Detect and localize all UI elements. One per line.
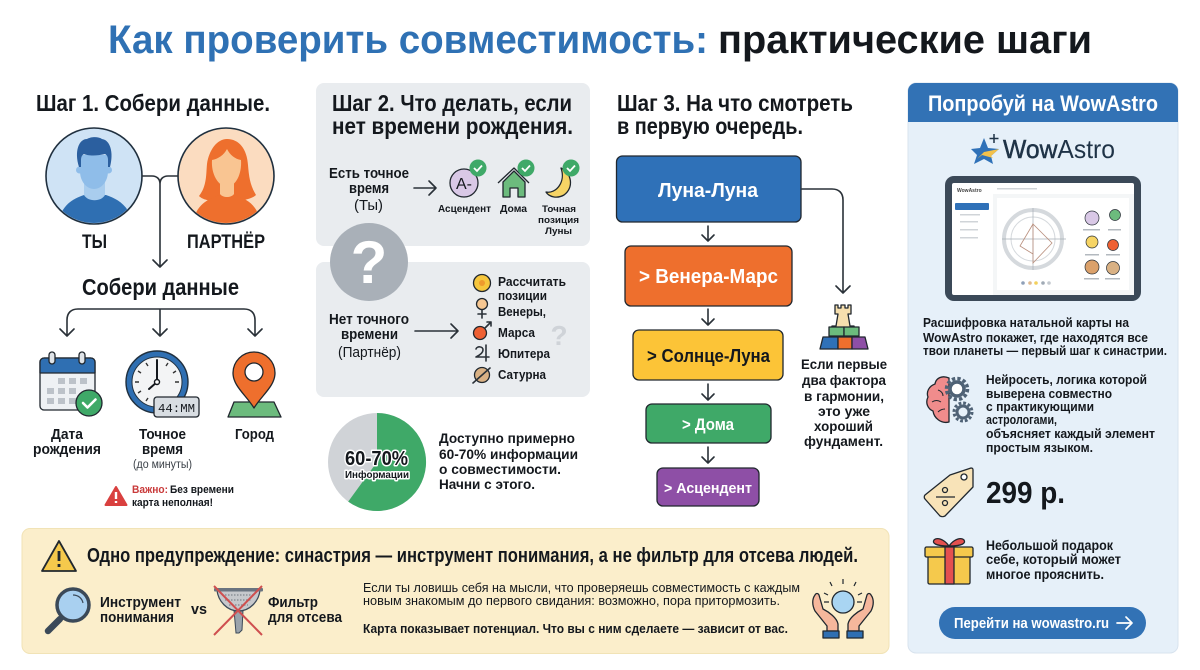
label: birth date: рождения	[33, 441, 101, 458]
label: understanding tool	[100, 594, 181, 626]
AI text	[986, 372, 1155, 455]
step 2 heading: нет времени рождения.	[332, 113, 573, 139]
label: ascendant: Асцендент	[438, 203, 491, 215]
title: практические шаги	[718, 18, 1092, 62]
AI text: астрологами,	[986, 412, 1057, 427]
step 3 heading	[617, 90, 853, 139]
icon: rook on blocks	[820, 305, 868, 349]
foundation note: фундамент.	[804, 433, 883, 449]
label: exact time: время	[142, 441, 183, 458]
box: moon-moon	[616, 156, 801, 222]
box: ascendant	[657, 468, 759, 506]
title: Как проверить совместимость:	[108, 18, 708, 62]
important note: карта неполная!	[132, 497, 213, 509]
icon: magnifier	[48, 589, 89, 631]
panel: step 1	[33, 90, 281, 509]
intro text: твои планеты — первый шаг к синастрии.	[923, 343, 1167, 358]
warning heading: Одно предупреждение: синастрия — инструмент понимания, а не фильтр для отсева людей.	[87, 544, 858, 567]
gift text: себе, который может	[986, 551, 1121, 567]
planets list: позиции	[498, 288, 547, 303]
step 3 heading: Шаг 3. На что смотреть	[617, 90, 853, 116]
arrow: down 3	[702, 384, 714, 400]
icon: saturn	[473, 368, 490, 383]
planets list: Рассчитать	[498, 274, 566, 289]
label: understanding tool: Инструмент	[100, 594, 181, 611]
icon: clock: 44:MM	[158, 402, 195, 416]
arrow: down 4	[702, 447, 714, 463]
label: exact time known	[329, 166, 409, 214]
arrow: avatars to collect data	[142, 176, 178, 267]
icon: brain and gears	[927, 377, 972, 422]
label: exact time: (до минуты)	[133, 459, 192, 471]
box: moon-moon: Луна-Луна	[658, 180, 759, 202]
label: screening filter	[268, 594, 343, 626]
box: venus-mars: > Венера-Марс	[639, 266, 778, 288]
planets list: Сатурна	[498, 367, 547, 382]
important note: Без времени	[170, 484, 234, 496]
label: city: Город	[235, 426, 274, 443]
foundation note: Если первые	[801, 356, 887, 372]
arrow: three branches	[60, 309, 262, 336]
pie chart caption: Доступно примерно	[439, 430, 575, 446]
planets list: Венеры,	[498, 304, 546, 319]
icon: price tag	[924, 468, 973, 517]
pie chart caption: о совместимости.	[439, 461, 561, 477]
icon: mars	[474, 322, 491, 340]
logo: WowAstro	[1003, 134, 1115, 164]
label: birth date	[33, 426, 101, 458]
label: exact time	[133, 426, 192, 471]
label: understanding tool: понимания	[100, 609, 174, 626]
gift text	[986, 537, 1121, 582]
icon: ascendant: A-	[456, 176, 472, 193]
box: sun-moon	[633, 330, 783, 380]
warning paragraph: Если ты ловишь себя на мысли, что проверяешь совместимость с каждым	[363, 580, 800, 595]
icon: crossed strainer	[214, 586, 263, 635]
warning paragraph: новым знакомым до первого свидания: возможно, пора притормозить.	[363, 593, 780, 608]
icon: partner avatar	[178, 128, 274, 226]
panel header	[908, 83, 1178, 122]
label: you: ТЫ	[82, 232, 107, 253]
step 3 heading: в первую очередь.	[617, 113, 803, 139]
intro text	[923, 315, 1167, 358]
AI text: простым языком.	[986, 440, 1093, 455]
AI text: с практикующими	[986, 399, 1094, 414]
tablet mockup: WowAstro	[957, 188, 982, 194]
intro text: WowAstro покажет, где находятся все	[923, 330, 1148, 345]
box: houses	[646, 404, 771, 443]
label: exact time known: время	[349, 181, 389, 197]
icon: warning triangle	[42, 541, 76, 571]
pie chart caption: 60-70% информации	[439, 446, 578, 462]
label: exact time: Точное	[139, 426, 186, 443]
button	[939, 607, 1146, 639]
icon: question circle	[330, 223, 408, 301]
pie chart caption	[439, 430, 578, 492]
gift text: Небольшой подарок	[986, 537, 1114, 553]
label: no exact time	[329, 312, 409, 361]
icon: venus	[476, 298, 488, 318]
icon: map pin	[228, 352, 281, 417]
foundation note: два фактора	[802, 372, 886, 388]
box: sun-moon: > Солнце-Луна	[647, 346, 771, 366]
icon: you avatar	[46, 128, 142, 226]
title	[108, 18, 1092, 62]
icon: hands and crystal ball	[813, 579, 873, 638]
box: ascendant: > Асцендент	[664, 480, 752, 497]
label: houses: Дома	[500, 203, 527, 215]
pie chart caption: Начни с этого.	[439, 476, 535, 492]
pie chart: 60-70 percent	[328, 413, 426, 511]
label: birth date: Дата	[51, 426, 84, 443]
icon: house	[498, 160, 534, 197]
price: 299 р.	[986, 475, 1065, 510]
important note: Важно:	[132, 484, 168, 496]
AI text: Нейросеть, логика которой	[986, 372, 1147, 387]
label: partner: ПАРТНЁР	[187, 232, 265, 253]
foundation note: в гармонии,	[804, 388, 884, 404]
warning paragraph: Карта показывает потенциал. Что вы с ним сделаете — зависит от вас.	[363, 621, 788, 636]
box: houses: > Дома	[682, 415, 734, 434]
label: moon position: позиция	[538, 215, 579, 226]
warning paragraph	[363, 580, 800, 636]
label: no exact time: Нет точного	[329, 312, 409, 328]
panel header: Попробуй на WowAstro	[928, 91, 1158, 116]
subheading: collect data: Собери данные	[82, 274, 239, 300]
icon: question circle: ?	[351, 229, 387, 296]
step 2 heading: Шаг 2. Что делать, если	[332, 90, 572, 116]
planets list	[498, 274, 566, 382]
panel: step 2 exact time	[316, 83, 590, 246]
AI text: выверена совместно	[986, 386, 1112, 401]
panel: try WowAstro	[908, 83, 1178, 653]
box: venus-mars	[625, 246, 792, 306]
intro text: Расшифровка натальной карты на	[923, 315, 1130, 330]
planets list: Марса	[498, 325, 536, 340]
foundation note: это уже	[818, 403, 870, 419]
icon: sun	[474, 274, 490, 292]
faint question mark: ?	[550, 320, 568, 351]
label: no exact time: времени	[341, 327, 398, 343]
foundation note: хороший	[814, 418, 873, 434]
label: moon position: Точная	[542, 204, 576, 215]
label: moon position: Луны	[545, 226, 572, 237]
icon: moon	[546, 160, 580, 197]
icon: gift	[925, 539, 973, 584]
icon: ascendant	[450, 160, 486, 197]
arrow: to foundation	[802, 189, 850, 293]
panel: step 2 no time	[316, 262, 590, 397]
step 1 heading: Шаг 1. Собери данные.	[36, 90, 270, 116]
arrow: down 1	[702, 226, 714, 241]
arrow: exact time	[414, 181, 436, 195]
panel: warning	[22, 528, 889, 654]
label: no exact time: (Партнёр)	[338, 345, 401, 361]
planets list: Юпитера	[498, 346, 551, 361]
foundation note	[801, 356, 887, 449]
icon: jupiter	[476, 345, 489, 361]
icon: calendar	[40, 352, 102, 416]
gift text: многое прояснить.	[986, 566, 1104, 582]
important note	[132, 484, 234, 509]
icon: warning red	[106, 487, 126, 505]
label: screening filter: для отсева	[268, 609, 343, 626]
tablet mockup	[945, 176, 1141, 301]
label: screening filter: Фильтр	[268, 594, 318, 611]
button: Перейти на wowastro.ru	[954, 616, 1109, 632]
panel: step 3	[616, 90, 887, 506]
label: moon position	[538, 204, 579, 237]
vs: vs	[191, 601, 207, 618]
step 2 heading	[332, 90, 573, 139]
pie chart: 60-70 percent: Информации	[345, 469, 409, 481]
AI text: объясняет каждый элемент	[986, 426, 1155, 441]
icon: clock	[126, 351, 199, 417]
pie chart: 60-70 percent: 60-70%	[345, 448, 408, 470]
arrow: down 2	[702, 309, 714, 325]
label: exact time known: (Ты)	[354, 198, 383, 214]
label: exact time known: Есть точное	[329, 166, 409, 182]
arrow: no time	[415, 324, 458, 338]
